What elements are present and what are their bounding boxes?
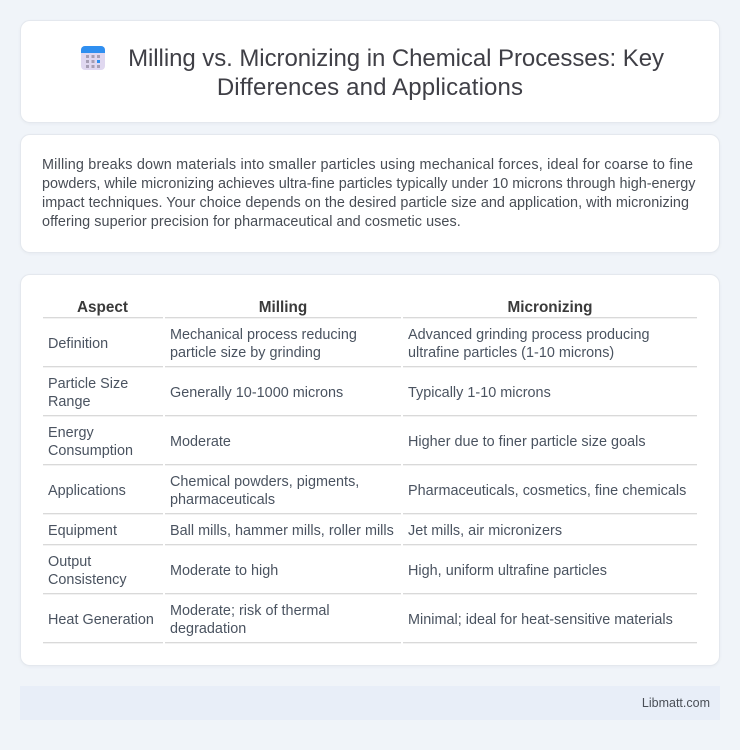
row: energy consumption <box>48 425 646 459</box>
row: output consistency: Consistency <box>48 572 127 588</box>
row: particle size range <box>48 376 551 410</box>
panel: comparison table <box>20 274 720 666</box>
footer <box>20 686 720 720</box>
text block: intro: powders, while micronizing achieves ultra-fine particles typically under 10 microns through high-energy <box>42 176 696 192</box>
title: Milling vs. Micronizing in Chemical Processes: Key <box>128 45 664 72</box>
row: definition: Advanced grinding process producing <box>408 327 650 343</box>
row: definition <box>48 327 650 361</box>
row: particle size range: Generally 10-1000 microns <box>170 385 343 401</box>
row: definition: Definition <box>48 336 108 352</box>
text block: intro: Milling breaks down materials into smaller particles using mechanical forces, ideal for coarse to fine <box>42 157 693 173</box>
icon: calendar <box>81 46 105 70</box>
title: Differences and Applications <box>217 74 523 101</box>
row: applications <box>48 474 686 508</box>
row: definition: Mechanical process reducing <box>170 327 357 343</box>
row: heat generation: Moderate; risk of thermal <box>170 603 330 619</box>
row: particle size range: Typically 1-10 microns <box>408 385 551 401</box>
row: definition: ultrafine particles (1-10 microns) <box>408 345 614 361</box>
row: energy consumption: Energy <box>48 425 94 441</box>
row: equipment: Equipment <box>48 523 117 539</box>
footer credit: Libmatt.com <box>642 696 710 710</box>
text block: intro: offering superior precision for pharmaceutical and cosmetic uses. <box>42 214 461 230</box>
panel: intro text <box>20 134 720 253</box>
row: particle size range: Range <box>48 394 91 410</box>
table header: Milling <box>259 299 307 316</box>
row: heat generation: Minimal; ideal for heat-sensitive materials <box>408 612 673 628</box>
text block: intro <box>42 157 696 230</box>
row: definition: particle size by grinding <box>170 345 321 361</box>
row: applications: Chemical powders, pigments, <box>170 474 359 490</box>
title <box>128 45 664 101</box>
row: energy consumption: Consumption <box>48 443 133 459</box>
row: applications: Applications <box>48 483 126 499</box>
table header: Micronizing <box>508 299 592 316</box>
row: output consistency <box>48 554 607 588</box>
row: heat generation: Heat Generation <box>48 612 154 628</box>
row: output consistency: Moderate to high <box>170 563 278 579</box>
table header: Aspect <box>77 299 128 316</box>
panel: header <box>20 20 720 123</box>
row: heat generation: degradation <box>170 621 246 637</box>
row: output consistency: High, uniform ultrafine particles <box>408 563 607 579</box>
table header <box>77 299 592 316</box>
row: equipment: Ball mills, hammer mills, roller mills <box>170 523 394 539</box>
row: energy consumption: Higher due to finer particle size goals <box>408 434 646 450</box>
row: equipment <box>48 523 562 539</box>
text block: intro: impact techniques. Your choice depends on the desired particle size and application, with micronizing <box>42 195 689 211</box>
row: heat generation <box>48 603 673 637</box>
row: applications: Pharmaceuticals, cosmetics, fine chemicals <box>408 483 686 499</box>
row: output consistency: Output <box>48 554 91 570</box>
row: equipment: Jet mills, air micronizers <box>408 523 562 539</box>
row: applications: pharmaceuticals <box>170 492 275 508</box>
row: energy consumption: Moderate <box>170 434 231 450</box>
row: particle size range: Particle Size <box>48 376 128 392</box>
